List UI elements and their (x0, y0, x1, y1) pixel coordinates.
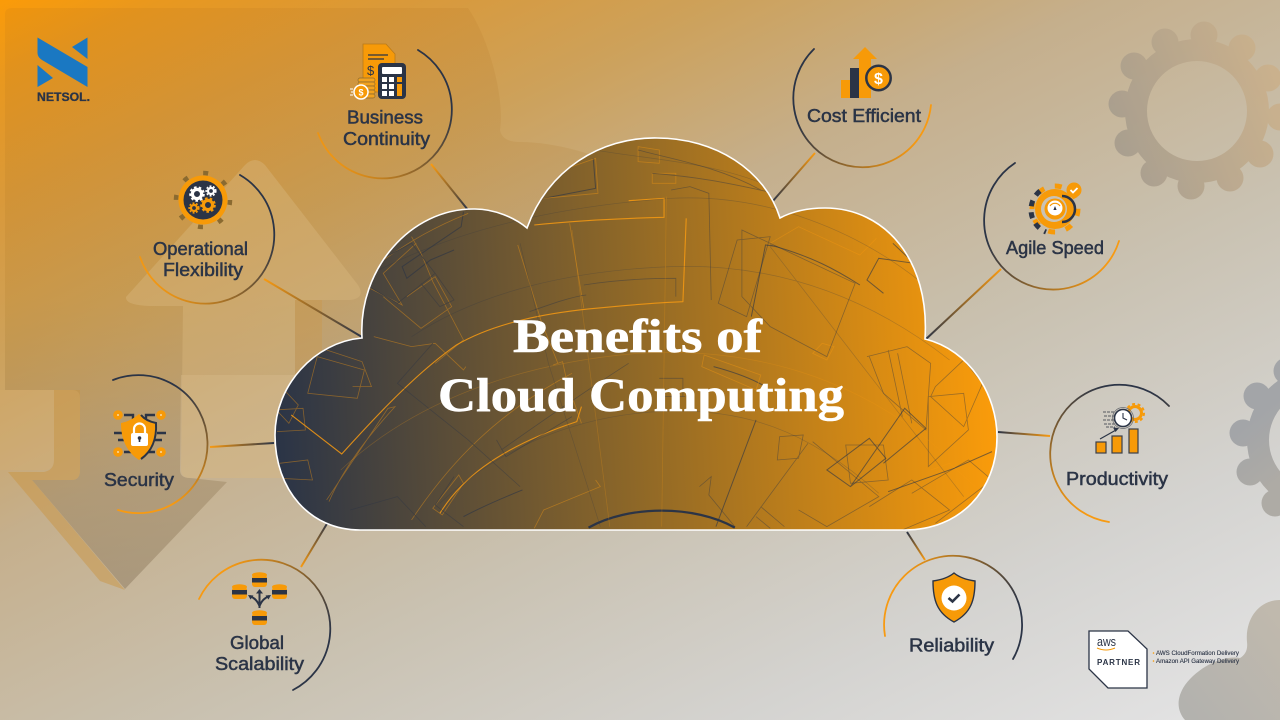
AWS partner badge: Amazon API Gateway Delivery (1156, 659, 1239, 665)
icon: check shield (933, 573, 975, 622)
title: Cloud Computing (438, 369, 844, 422)
label: Global (230, 633, 284, 653)
icon: document and calculator: $ (367, 63, 375, 78)
item: Global Scalability (199, 560, 330, 690)
icon: speedometer gear (1031, 182, 1082, 232)
item: Operational Flexibility (140, 173, 274, 304)
background: gear top right (1108, 22, 1280, 200)
label: Productivity (1066, 469, 1168, 489)
background: up arrow (126, 160, 361, 478)
label: Business (347, 108, 423, 128)
icon: gears badge (176, 173, 230, 227)
background: gear right edge (1230, 358, 1280, 516)
item: Business Continuity (318, 44, 452, 178)
background: large faded cloud silhouette with down arrow (5, 8, 650, 589)
icon: databases with arrows (232, 572, 287, 625)
background: down arrow sides (0, 390, 125, 590)
icon: document and calculator (350, 44, 406, 99)
label (215, 633, 304, 674)
label: Scalability (215, 654, 304, 674)
icon: rising bars and coin: $ (874, 71, 883, 88)
label: Continuity (343, 129, 430, 149)
background: cloud bottom right (1179, 600, 1280, 720)
label: Operational (153, 239, 248, 259)
label: Agile Speed (1006, 238, 1104, 258)
label: Flexibility (163, 260, 243, 280)
item: Agile Speed (984, 163, 1119, 290)
item: Cost Efficient (793, 47, 931, 167)
logo: NETSOL: NETSOL. (37, 90, 90, 104)
central cloud (275, 137, 997, 530)
label (343, 108, 430, 149)
item: Productivity (1050, 385, 1169, 522)
item: Security (104, 375, 207, 513)
label (153, 239, 248, 280)
icon: bars, clock and gear (1096, 404, 1144, 453)
label: Security (104, 470, 174, 490)
connector lines (210, 153, 1050, 567)
title (438, 310, 844, 422)
icon: circuit shield with lock (113, 410, 166, 460)
AWS partner badge (1089, 631, 1239, 688)
label: Reliability (909, 636, 994, 656)
AWS partner badge: AWS CloudFormation Delivery (1156, 651, 1239, 657)
icon: document and calculator: $ (358, 88, 364, 98)
AWS partner badge: aws (1097, 635, 1116, 649)
label: Cost Efficient (807, 106, 921, 126)
cloud texture lines (275, 137, 992, 530)
AWS partner badge: PARTNER (1097, 658, 1140, 667)
item: Reliability (884, 556, 1022, 659)
title: Benefits of (513, 310, 763, 363)
logo: NETSOL (37, 38, 90, 104)
